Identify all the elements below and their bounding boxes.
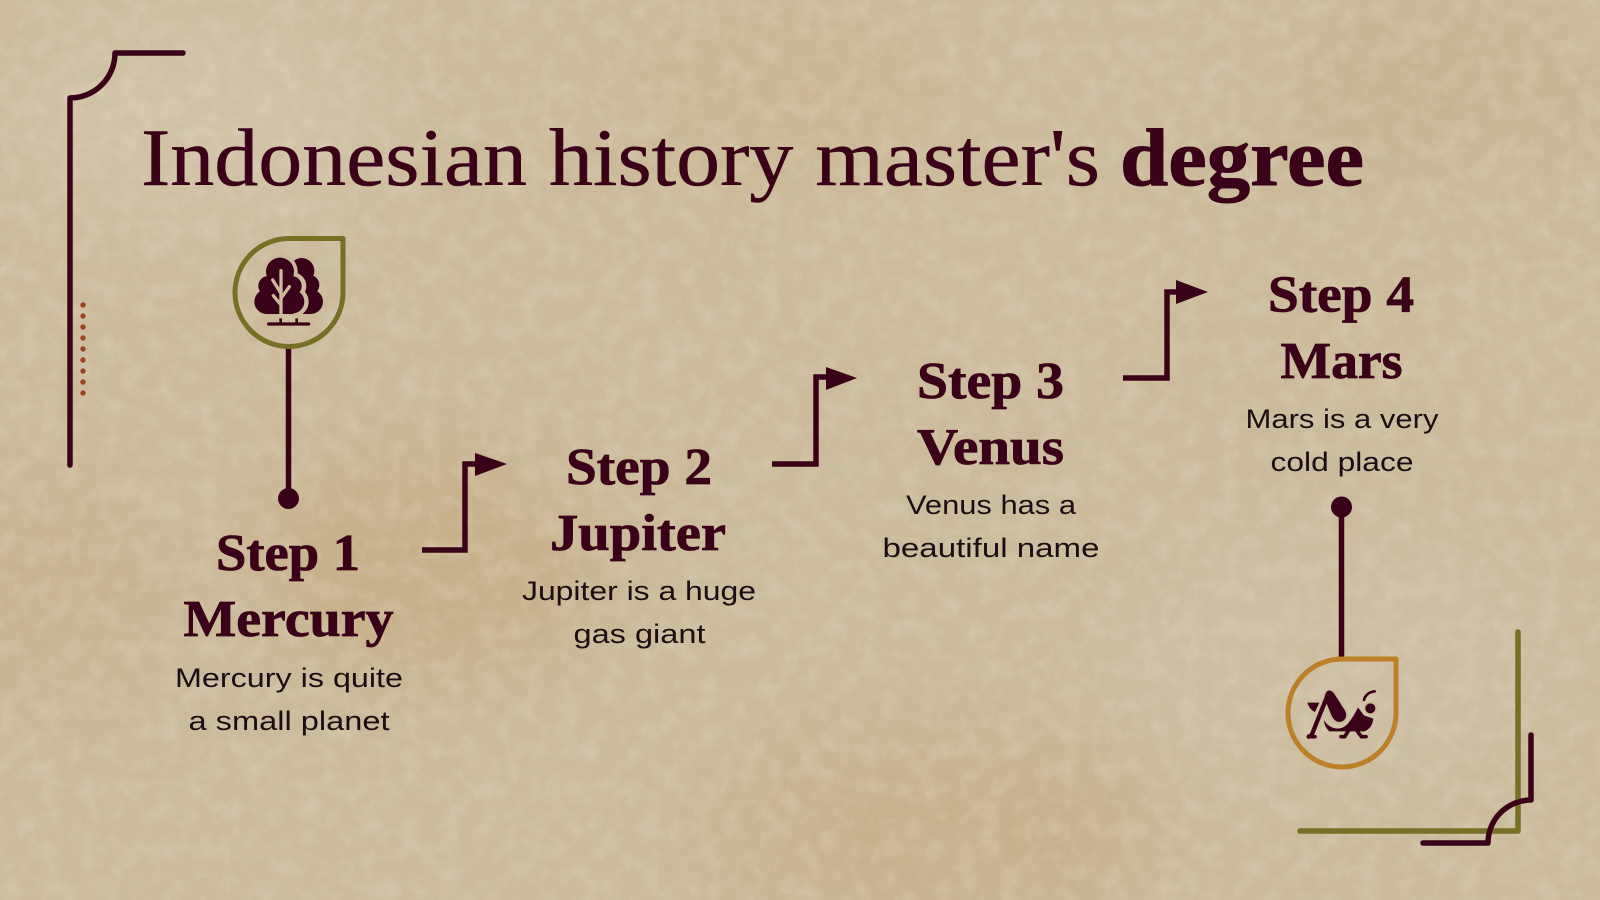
icon: tree in olive teardrop bbox=[235, 238, 343, 346]
heading: Mercury: Mercury bbox=[184, 591, 394, 648]
description: Venus: beautiful name bbox=[882, 533, 1100, 563]
heading: step 2: Step 2 bbox=[566, 439, 712, 496]
bottom-right olive corner bracket bbox=[1300, 632, 1518, 831]
description: Jupiter: gas giant bbox=[574, 619, 706, 649]
description: Mars: Mars is a very bbox=[1246, 404, 1439, 434]
body bbox=[1324, 707, 1373, 731]
step 3: Venus bbox=[882, 353, 1100, 563]
step 4: Mars bbox=[1246, 266, 1439, 767]
icon: cricket in amber teardrop bbox=[1288, 659, 1396, 767]
heading: step 4: Step 4 bbox=[1268, 266, 1414, 324]
heading: step 1: Step 1 bbox=[216, 525, 360, 582]
description: Mars bbox=[1246, 404, 1439, 477]
legs and antenna bbox=[1309, 691, 1375, 737]
description: Mercury: Mercury is quite bbox=[175, 663, 403, 693]
arrow: step 1 to step 2 bbox=[422, 453, 507, 550]
dotted vertical accent bbox=[80, 302, 86, 396]
step 2: Jupiter bbox=[522, 439, 756, 649]
arrow: step 2 to step 3 bbox=[772, 367, 857, 464]
left tail piece bbox=[1307, 703, 1319, 712]
title: Indonesian history master's bbox=[141, 112, 1100, 203]
step 1: Mercury bbox=[175, 238, 403, 736]
description: Jupiter bbox=[522, 576, 756, 649]
arrow: step 3 to step 4 bbox=[1123, 280, 1208, 378]
bottom-right maroon corner bracket bbox=[1423, 735, 1531, 843]
top-left corner bracket bbox=[70, 53, 183, 465]
heading: step 3: Step 3 bbox=[917, 353, 1064, 410]
connector: step 1 stem and dot bbox=[278, 347, 299, 509]
description: Mercury: a small planet bbox=[188, 706, 390, 736]
description: Venus bbox=[882, 490, 1100, 563]
heading: Venus: Venus bbox=[917, 419, 1064, 476]
heading: Jupiter: Jupiter bbox=[550, 505, 726, 562]
title: degree bbox=[1120, 112, 1364, 203]
description: Venus: Venus has a bbox=[906, 490, 1077, 520]
description: Jupiter: Jupiter is a huge bbox=[522, 576, 756, 606]
heading: Mars: Mars bbox=[1280, 333, 1402, 390]
description: Mercury bbox=[175, 663, 403, 736]
description: Mars: cold place bbox=[1270, 447, 1414, 477]
connector: step 4 stem and dot bbox=[1331, 496, 1352, 657]
head with light ring bbox=[1364, 702, 1376, 714]
wing with light outline bbox=[1324, 689, 1347, 723]
